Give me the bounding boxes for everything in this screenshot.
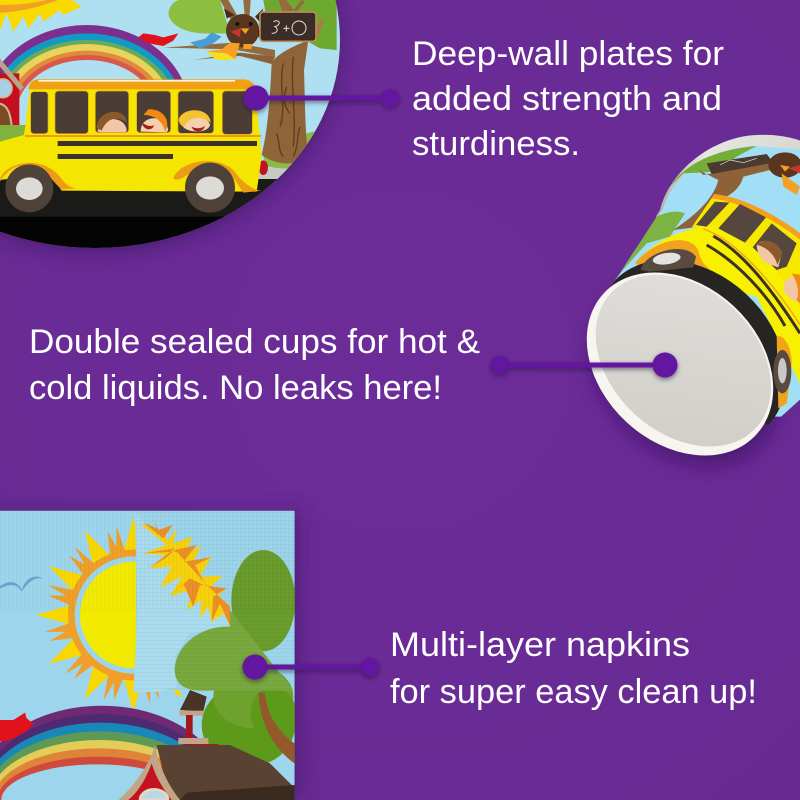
plate: birds xyxy=(138,32,240,60)
cup: rim xyxy=(650,130,800,217)
bus stripes xyxy=(58,141,257,146)
plate: road xyxy=(0,178,278,218)
cup bus windows xyxy=(696,202,729,227)
building front gable xyxy=(118,745,180,800)
bus body xyxy=(0,88,262,192)
cup: sky xyxy=(603,146,800,417)
napkin: rainbow xyxy=(0,706,230,800)
callout: plates connector xyxy=(244,86,399,110)
plate: foliage xyxy=(168,0,337,170)
text: napkins xyxy=(390,626,757,711)
plate: tree trunk xyxy=(163,0,325,164)
bus windows xyxy=(31,91,252,134)
plate: rainbow xyxy=(0,25,182,100)
cup bus belt line xyxy=(703,229,800,330)
cup bus roof xyxy=(712,194,800,240)
cup: bottom xyxy=(550,235,800,493)
napkin: lower tree xyxy=(202,665,297,767)
bus fenders xyxy=(0,163,77,189)
cup bus lower body xyxy=(643,228,800,384)
cup bus children xyxy=(757,241,782,267)
bus wheels xyxy=(5,164,53,212)
cup xyxy=(586,134,800,456)
napkin: red bird xyxy=(0,713,33,742)
napkin: ribbed texture xyxy=(0,511,295,611)
plate shadow xyxy=(0,0,342,254)
cup shadow xyxy=(554,245,800,503)
text: cups: cold liquids. No leaks here! xyxy=(29,369,442,407)
plate: grass xyxy=(0,125,26,142)
building tower xyxy=(180,690,207,712)
cup: bus xyxy=(635,194,800,397)
cup bus front fender xyxy=(635,240,710,270)
plate: chalkboard xyxy=(260,12,316,41)
text: cups: Double sealed cups for hot & xyxy=(29,323,480,361)
bus roof xyxy=(28,79,257,89)
napkin: upper tree xyxy=(231,550,295,651)
napkin shadow xyxy=(0,512,300,800)
text: napkins: for super easy clean up! xyxy=(390,673,757,711)
plate: school bus xyxy=(0,79,262,213)
cup: black road band xyxy=(610,262,780,425)
plate: pavement and car xyxy=(258,160,288,179)
text: plates: Deep-wall plates for xyxy=(412,35,724,73)
text: plates: sturdiness. xyxy=(412,125,580,163)
napkin: bird silhouette xyxy=(0,577,43,592)
text: plates: added strength and xyxy=(412,80,722,118)
cup bus stripes xyxy=(707,236,800,333)
napkin: sun xyxy=(36,518,231,712)
plate with school bus artwork xyxy=(0,0,340,248)
cup: grass xyxy=(620,146,757,273)
plate: school building xyxy=(0,58,24,125)
cup bus upper body xyxy=(692,197,800,304)
plate: owl xyxy=(224,8,264,49)
text: cups xyxy=(29,323,480,407)
napkin: school building xyxy=(118,690,295,800)
cup: wheels xyxy=(641,249,792,408)
cup: owl xyxy=(768,152,800,195)
napkin: flap sun rays xyxy=(140,520,230,626)
cup: chalkboard xyxy=(707,154,773,174)
callout: napkins connector xyxy=(242,654,379,680)
text: napkins: Multi-layer napkins xyxy=(390,626,690,664)
napkin xyxy=(0,511,297,800)
napkin: folded flap xyxy=(133,511,295,693)
cup: tree xyxy=(674,164,770,230)
text: plates xyxy=(412,35,724,163)
plate: sun xyxy=(0,0,82,32)
callout: cups connector xyxy=(491,352,678,378)
bus children xyxy=(97,109,211,132)
building roof xyxy=(157,745,295,800)
